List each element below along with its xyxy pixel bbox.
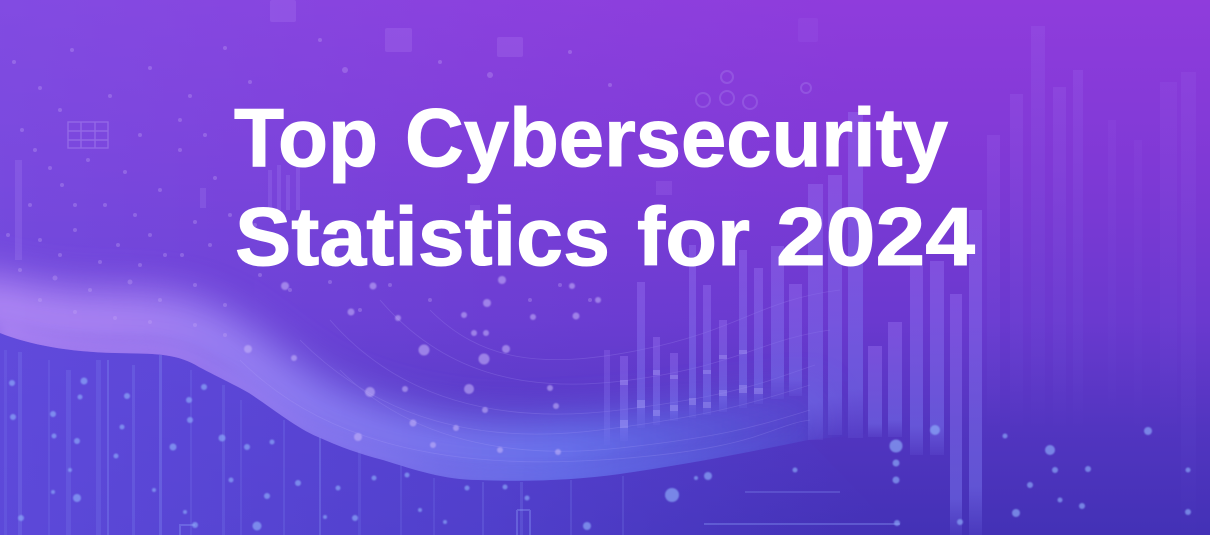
title line 2 — [235, 190, 975, 283]
icon: interface squares — [270, 0, 818, 195]
chart baseline marks — [180, 492, 900, 535]
title — [234, 91, 975, 283]
bar chart: tall faint bars right — [987, 26, 1196, 535]
title line 2: Statistics — [235, 190, 610, 283]
vertical data lines — [4, 350, 624, 535]
title line 1: Cybersecurity — [405, 91, 948, 184]
data dots: lower field — [9, 378, 1191, 530]
glowing wave — [0, 290, 840, 481]
small pixel ticks on bars — [620, 350, 763, 428]
icon: circular symbols — [696, 71, 811, 109]
data dots: upper field — [6, 38, 612, 337]
title line 2: 2024 — [776, 190, 975, 283]
lower-left blue data field — [0, 333, 900, 535]
bar chart: central bars — [604, 112, 982, 535]
data dots: bright mid field — [244, 276, 601, 455]
icon: table grid — [68, 122, 108, 148]
title line 1: Top — [234, 91, 378, 184]
small bars behind title — [15, 160, 480, 260]
title line 2: for — [637, 190, 750, 283]
